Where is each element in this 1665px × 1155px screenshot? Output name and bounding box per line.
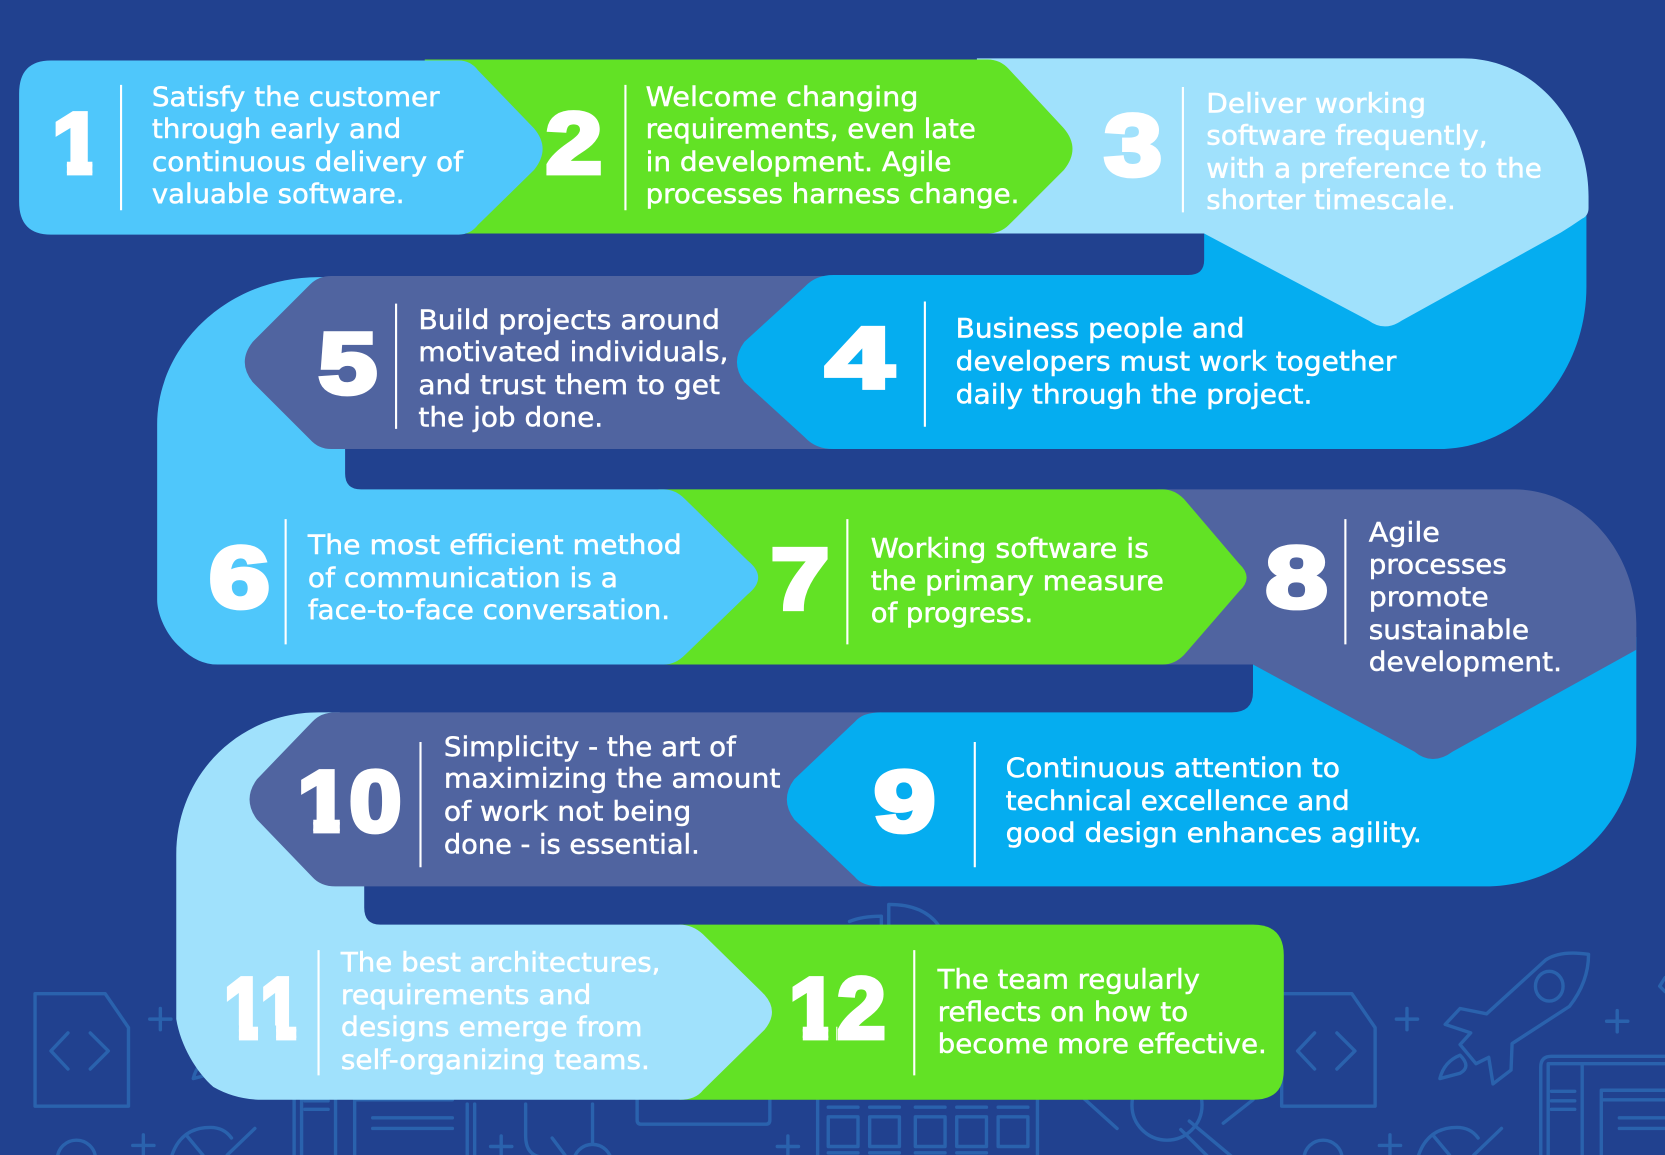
text: step 1: valuable software.	[152, 179, 405, 210]
panel: step 8 slate	[1157, 489, 1636, 759]
text: step 2	[646, 82, 1019, 210]
text: step 12: reflects on how to	[938, 997, 1188, 1028]
panel: step 5 slate	[245, 276, 839, 449]
step 5	[245, 276, 839, 449]
panel: step 9 cyan	[787, 637, 1636, 886]
text: step 6: of communication is a	[308, 563, 618, 594]
number 11: 11	[224, 961, 301, 1057]
step 7	[658, 489, 1247, 665]
text: step 6	[307, 530, 682, 626]
panel: step 2 green	[425, 59, 1072, 234]
text: step 4: daily through the project.	[956, 379, 1312, 410]
step 9	[787, 637, 1636, 886]
text: step 12	[937, 964, 1267, 1060]
number 3: 3	[1104, 98, 1162, 194]
number 2: 2	[546, 96, 602, 192]
text: step 5: and trust them to get	[418, 370, 720, 401]
panel: step 11 pale blue	[176, 712, 772, 1100]
text: step 8: sustainable	[1369, 615, 1529, 646]
text: step 8	[1369, 517, 1562, 678]
text: step 7: Working software is	[871, 533, 1149, 564]
panel: step 10 slate	[250, 712, 881, 886]
number 5: 5	[319, 316, 377, 412]
background pattern: software line icons	[35, 904, 1665, 1155]
number 9: 9	[874, 754, 936, 850]
text: step 11	[340, 947, 660, 1076]
step 3	[977, 58, 1589, 326]
text: step 10: Simplicity - the art of	[444, 732, 737, 763]
step 6	[157, 277, 758, 665]
text: step 11: requirements and	[341, 980, 591, 1011]
text: step 2: requirements, even late	[646, 114, 976, 145]
text: step 2: in development. Agile	[646, 147, 951, 178]
number 7: 7	[771, 531, 829, 627]
step 8	[1157, 489, 1636, 759]
step 2	[425, 59, 1072, 234]
panel: step 4 cyan	[737, 159, 1586, 449]
number 10: 10	[297, 754, 401, 850]
text: step 4: developers must work together	[956, 346, 1397, 377]
text: step 7	[871, 533, 1164, 629]
text: step 4	[956, 314, 1397, 410]
number 4: 4	[826, 310, 894, 406]
text: step 10: done - is essential.	[444, 830, 700, 861]
text: step 11: The best architectures,	[340, 947, 660, 978]
text: step 3	[1206, 89, 1542, 216]
text: step 1: Satisfy the customer	[152, 82, 440, 113]
text: step 5: motivated individuals,	[418, 337, 728, 368]
text: step 6: face-to-face conversation.	[308, 595, 670, 626]
number 1: 1	[52, 96, 102, 192]
text: step 11: self-organizing teams.	[341, 1045, 650, 1076]
text: step 7: of progress.	[871, 598, 1033, 629]
panel: step 1 light blue	[19, 61, 543, 235]
step 1	[19, 61, 543, 235]
step 10	[250, 712, 881, 886]
text: step 12: become more effective.	[938, 1029, 1267, 1060]
text: step 2: Welcome changing	[646, 82, 919, 113]
text: step 10: maximizing the amount	[444, 764, 780, 795]
text: step 6: The most efficient method	[307, 530, 682, 561]
text: step 5: Build projects around	[418, 305, 720, 336]
text: step 3: shorter timescale.	[1206, 185, 1456, 216]
text: step 10: of work not being	[444, 797, 691, 828]
number 12: 12	[789, 961, 886, 1057]
text: step 3: Deliver working	[1206, 89, 1426, 120]
text: step 9: Continuous attention to	[1006, 753, 1340, 784]
step 4	[737, 159, 1586, 449]
text: step 7: the primary measure	[871, 566, 1164, 597]
text: step 1: continuous delivery of	[152, 147, 464, 178]
text: step 9: technical excellence and	[1006, 786, 1350, 817]
step 12	[680, 925, 1284, 1100]
text: step 3: with a preference to the	[1206, 153, 1542, 184]
step 11	[176, 712, 772, 1100]
text: step 5	[418, 305, 728, 434]
text: step 9: good design enhances agility.	[1006, 818, 1422, 849]
text: step 12: The team regularly	[937, 964, 1200, 995]
panel: step 6 light blue	[157, 277, 758, 665]
panel: step 12 green	[680, 925, 1284, 1100]
text: step 10	[444, 732, 780, 861]
text: step 11: designs emerge from	[341, 1012, 642, 1043]
panel: step 7 green	[658, 489, 1247, 665]
text: step 4: Business people and	[956, 314, 1245, 345]
text: step 1: through early and	[152, 114, 401, 145]
text: step 3: software frequently,	[1206, 120, 1488, 151]
text: step 8: promote	[1369, 582, 1489, 613]
panel: step 3 pale blue	[977, 58, 1589, 326]
text: step 1	[152, 82, 464, 210]
text: step 8: development.	[1369, 647, 1562, 678]
text: step 8: Agile	[1369, 517, 1440, 548]
text: step 5: the job done.	[418, 403, 603, 434]
text: step 9	[1006, 753, 1422, 849]
text: step 8: processes	[1369, 549, 1507, 580]
number 6: 6	[209, 530, 270, 626]
number 8: 8	[1266, 530, 1327, 626]
text: step 2: processes harness change.	[646, 179, 1019, 210]
